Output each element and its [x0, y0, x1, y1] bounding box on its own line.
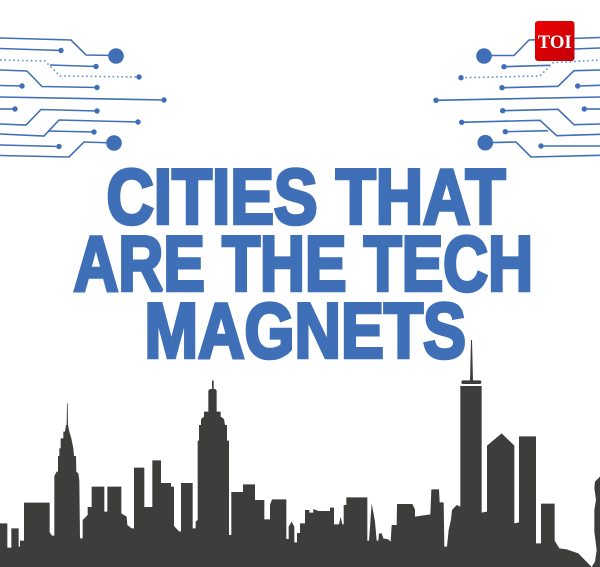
logo: TOI: [535, 21, 574, 61]
circuit traces: right: [433, 38, 600, 157]
skyline: right half with spire tower and statue: [300, 340, 600, 567]
skyline: left half with art deco towers: [0, 381, 301, 567]
city skyline silhouette: [0, 340, 600, 567]
title: [74, 152, 533, 374]
title: MAGNETS: [144, 286, 466, 374]
circuit traces: left: [0, 38, 167, 157]
logo: TOI: TOI: [538, 32, 572, 53]
title: CITIES THAT: [106, 152, 506, 240]
